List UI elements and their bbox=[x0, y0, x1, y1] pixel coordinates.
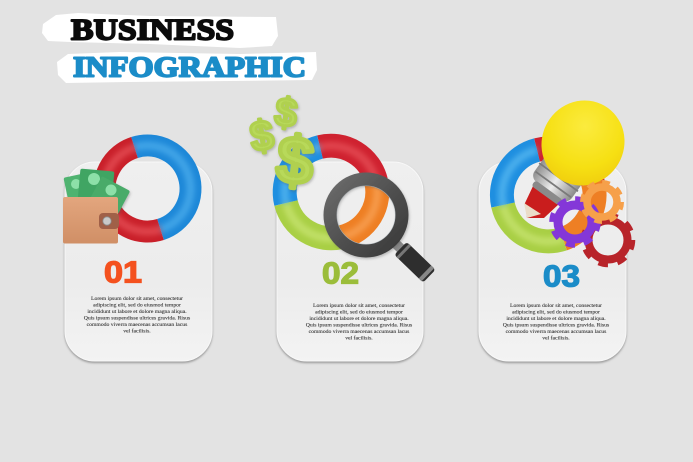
text block: commodo viverra maecenas accumsan lacus bbox=[309, 329, 410, 335]
text block: commodo viverra maecenas accumsan lacus bbox=[87, 322, 188, 328]
heading: business: BUSINESS bbox=[71, 14, 234, 46]
text block bbox=[306, 303, 413, 342]
banknotes bbox=[63, 169, 130, 214]
icon: orange gear bbox=[582, 182, 622, 222]
text block: incididunt ut labore et dolore magna aliqua. bbox=[506, 316, 606, 322]
text block: incididunt ut labore et dolore magna aliqua. bbox=[309, 316, 409, 322]
icon: wallet with cash bbox=[63, 169, 130, 244]
text block: adipiscing elit, sed do eiusmod tempor bbox=[512, 310, 600, 316]
wallet body bbox=[63, 197, 118, 244]
ring chart bbox=[285, 146, 377, 238]
screw base bbox=[526, 148, 589, 210]
text block: vel facilisis. bbox=[345, 334, 373, 342]
icon: dollar signs: $ bbox=[272, 90, 300, 136]
heading: infographic: INFOGRAPHIC bbox=[73, 52, 306, 84]
handle bbox=[389, 236, 436, 283]
card bbox=[65, 162, 212, 361]
ring chart bbox=[502, 149, 595, 241]
icon: red gear bbox=[584, 216, 632, 264]
panel: step 01 bbox=[63, 145, 212, 361]
text block bbox=[84, 296, 191, 334]
text block bbox=[503, 303, 610, 342]
panel: step 03 bbox=[479, 85, 640, 361]
icon: dollar signs: $ bbox=[247, 111, 277, 160]
text block: Quis ipsum suspendisse ultrices gravida. Risus bbox=[306, 322, 413, 328]
lens rim bbox=[330, 179, 402, 251]
clasp bbox=[99, 213, 119, 229]
number: 03 bbox=[543, 258, 580, 294]
text block: Lorem ipsum dolor sit amet, consectetur bbox=[313, 303, 405, 309]
text block: Quis ipsum suspendisse ultrices gravida. Risus bbox=[84, 316, 191, 322]
text block: Lorem ipsum dolor sit amet, consectetur bbox=[510, 303, 602, 309]
icon: dollar signs bbox=[247, 90, 317, 199]
text block: commodo viverra maecenas accumsan lacus bbox=[506, 329, 607, 335]
lens inner ring bbox=[335, 184, 397, 246]
card bbox=[479, 162, 626, 361]
panel: step 02 bbox=[247, 90, 436, 361]
icon: pencil bbox=[524, 184, 560, 218]
brush stroke: infographic bbox=[57, 52, 317, 83]
text block: vel facilisis. bbox=[123, 328, 151, 334]
icon: light bulb bbox=[526, 85, 640, 210]
card bbox=[277, 162, 423, 361]
brush stroke: business bbox=[42, 13, 278, 48]
icon: purple gear bbox=[552, 199, 598, 245]
text block: vel facilisis. bbox=[542, 334, 570, 342]
icon: dollar signs: $ bbox=[273, 121, 317, 199]
ring chart bbox=[105, 145, 190, 232]
title bbox=[42, 13, 317, 84]
number: 02 bbox=[322, 256, 359, 290]
icon: magnifying glass bbox=[330, 179, 436, 283]
text block: Lorem ipsum dolor sit amet, consectetur bbox=[91, 296, 183, 302]
text block: adipiscing elit, sed do eiusmod tempor bbox=[93, 302, 181, 308]
text block: incididunt ut labore et dolore magna aliqua. bbox=[87, 309, 187, 315]
text block: adipiscing elit, sed do eiusmod tempor bbox=[315, 310, 403, 316]
glass bbox=[526, 85, 640, 201]
number: 01 bbox=[104, 254, 142, 290]
text block: Quis ipsum suspendisse ultrices gravida. Risus bbox=[503, 322, 610, 328]
